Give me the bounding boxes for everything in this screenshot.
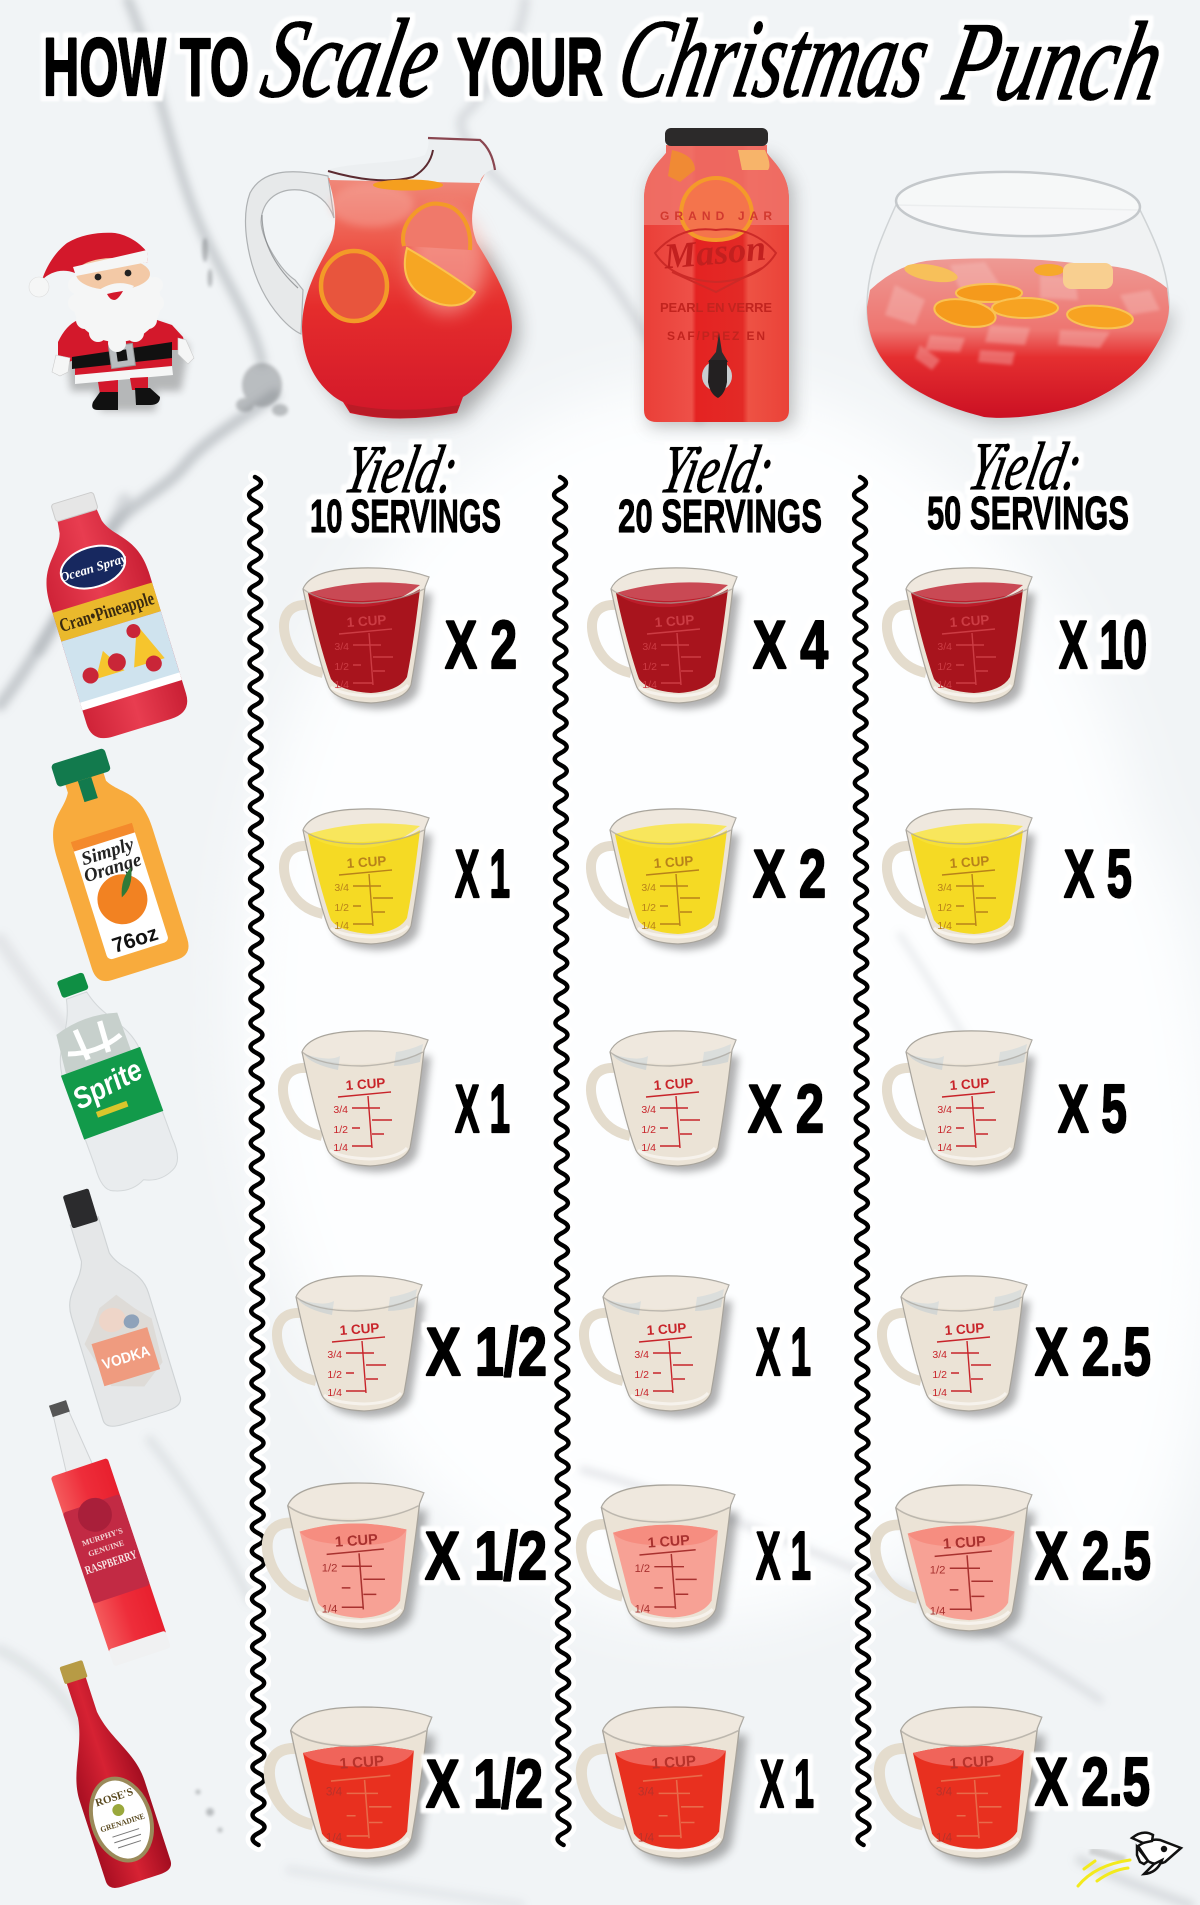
cup: grenadine x1 (581, 1707, 747, 1865)
cup: cranberry x4: 1/2 (642, 661, 657, 673)
cup: vodka x1/2: 1 CUP (339, 1320, 380, 1338)
cup: raspberry x1: 1/2 (635, 1563, 650, 1575)
header: 50 servings: Yield: (963, 429, 1089, 504)
illustration: mason jar dispenser (644, 128, 793, 426)
multipliers: raspberry: X 1 (756, 1518, 811, 1594)
multipliers: cranberry: X 4 (753, 607, 828, 683)
measuring cups: sprite row (283, 1031, 1035, 1172)
cup: orange x2: 1/2 (641, 902, 656, 914)
cup: sprite x2: 1/4 (641, 1142, 656, 1154)
multipliers: raspberry: X 2.5 (1035, 1518, 1151, 1594)
measuring cups: grenadine row (269, 1707, 1045, 1865)
bottle: raspberry liqueur: RASPBERRY (83, 1547, 139, 1577)
multipliers: sprite: X 2 (748, 1071, 824, 1147)
header: 10 servings (310, 432, 501, 542)
cup: grenadine x1/2 (269, 1707, 435, 1865)
header: 20 servings (618, 432, 822, 542)
multipliers: grenadine: X 2.5 (1035, 1744, 1150, 1820)
cup: sprite x5: 1 CUP (949, 1075, 990, 1093)
title: HOW TO (43, 22, 249, 113)
cup: orange x1: 1/2 (334, 902, 349, 914)
title: Scale (253, 0, 451, 121)
cup: grenadine x1/2: 1 CUP (339, 1753, 385, 1773)
cup: vodka x1: 1/4 (634, 1387, 649, 1399)
bottle: raspberry liqueur: MURPHY'S (81, 1526, 125, 1548)
cup: grenadine x1: 1/4 (638, 1832, 655, 1845)
bottle: simply orange juice: Orange (81, 849, 145, 887)
multipliers: vodka: X 2.5 (1035, 1314, 1151, 1390)
bottle: raspberry liqueur: GENUINE (87, 1538, 125, 1559)
multipliers: sprite: X 1 (455, 1071, 510, 1147)
cup: sprite x1: 1/4 (333, 1142, 348, 1154)
cup: orange x2 (591, 809, 739, 950)
cup: raspberry x1 (581, 1485, 738, 1635)
cup: raspberry x1: 1 CUP (647, 1533, 691, 1552)
multipliers: orange juice: X 2 (753, 836, 826, 912)
cup: sprite x5 (887, 1031, 1035, 1172)
bottle: grenadine: ROSE'S (94, 1786, 135, 1809)
cup: vodka x1: 1/2 (634, 1369, 649, 1381)
illustration: punch bowl (867, 169, 1173, 422)
header: 20 servings: Yield: (655, 432, 781, 507)
bottle: vodka (37, 1180, 183, 1430)
cup: vodka x2.5: 1/4 (932, 1387, 947, 1399)
cup: grenadine x1: 1 CUP (651, 1753, 697, 1773)
cup: grenadine x2.5: 1 CUP (949, 1753, 995, 1773)
cup: orange x1: 1/4 (334, 920, 349, 932)
cup: raspberry x2.5: 1 CUP (942, 1534, 987, 1553)
cup: sprite x2 (591, 1031, 739, 1172)
multipliers: orange juice: X 1 (455, 836, 510, 912)
bottle: vodka: VODKA (100, 1343, 153, 1373)
illustration: mason jar dispenser: GRAND JAR (660, 209, 772, 223)
cup: cranberry x2: 1/4 (334, 679, 349, 691)
multipliers: grenadine: X 1 (760, 1746, 814, 1822)
cup multipliers (425, 607, 1151, 1822)
cup: sprite x2: 1/2 (641, 1124, 656, 1136)
cup: orange x2: 1/4 (641, 920, 656, 932)
cup: grenadine x2.5: 3/4 (936, 1786, 953, 1799)
cup: orange x5: 1/2 (937, 902, 952, 914)
multipliers: raspberry: X 1/2 (425, 1518, 547, 1594)
cup: sprite x1: 3/4 (333, 1104, 348, 1116)
cup: vodka x1/2: 1/4 (327, 1387, 342, 1399)
cup: cranberry x2 (284, 568, 432, 709)
cup: raspberry x2.5: 1/2 (930, 1565, 945, 1577)
bottle: sprite (30, 962, 185, 1198)
bottle: raspberry liqueur (29, 1393, 171, 1667)
title: Christmas (609, 0, 940, 121)
cup: sprite x5: 3/4 (937, 1104, 952, 1116)
multipliers: grenadine (426, 1744, 1150, 1822)
multipliers: sprite: X 5 (1058, 1071, 1127, 1147)
cup: sprite x1: 1 CUP (345, 1075, 386, 1093)
title (43, 0, 1174, 124)
cup: raspberry x1/2: 1/4 (322, 1604, 337, 1616)
cup: vodka x2.5 (882, 1276, 1030, 1417)
cup: cranberry x2: 1/2 (334, 661, 349, 673)
cup: grenadine x2.5 (879, 1707, 1045, 1865)
illustration: pitcher of punch (246, 137, 519, 424)
title: YOUR (457, 22, 603, 113)
multipliers: cranberry: X 10 (1059, 607, 1147, 683)
cup: cranberry x4: 3/4 (642, 641, 657, 653)
cup: cranberry x4 (592, 568, 740, 709)
multipliers: vodka: X 1/2 (426, 1314, 547, 1390)
cup: sprite x2: 1 CUP (653, 1075, 694, 1093)
illustration: mason jar dispenser: SAF/PREZ EN (667, 329, 765, 343)
header: 10 servings: Yield: (339, 432, 465, 507)
multipliers: grenadine: X 1/2 (426, 1746, 543, 1822)
cup: vodka x2.5: 1/2 (932, 1369, 947, 1381)
cup: orange x5 (887, 809, 1035, 950)
cup: cranberry x2: 1 CUP (346, 612, 387, 630)
multipliers: cranberry (445, 607, 1147, 683)
wavy column dividers (249, 477, 870, 1845)
icon: rocket logo (1078, 1833, 1181, 1886)
bottle: sprite: Sprite (67, 1053, 148, 1116)
cup: vodka x1 (584, 1276, 732, 1417)
bottle: cranberry pineapple juice (22, 483, 192, 743)
cup: orange x5: 3/4 (937, 882, 952, 894)
measuring cups: raspberry row (267, 1483, 1035, 1637)
cup: vodka x1: 3/4 (634, 1349, 649, 1361)
icon: santa (29, 233, 194, 411)
cup: orange x2: 3/4 (641, 882, 656, 894)
cup: orange x5: 1 CUP (949, 853, 990, 871)
cup: grenadine x1/2: 1/4 (326, 1832, 343, 1845)
cup: raspberry x1/2: 1/2 (322, 1563, 337, 1575)
cup: vodka x2.5: 1 CUP (944, 1320, 985, 1338)
cup: sprite x1 (283, 1031, 431, 1172)
cup: grenadine x2.5: 1/4 (936, 1832, 953, 1845)
multipliers: vodka: X 1 (756, 1314, 811, 1390)
illustration: mason jar dispenser: Mason (661, 228, 768, 277)
measuring cups: cranberry row (284, 568, 1035, 709)
cup: orange x1 (284, 809, 432, 950)
multipliers: sprite (455, 1071, 1127, 1147)
cup: vodka x1: 1 CUP (646, 1320, 687, 1338)
bottle: grenadine: GRENADINE (99, 1811, 146, 1834)
cup: sprite x2: 3/4 (641, 1104, 656, 1116)
bottle: cranberry pineapple juice: Ocean Spray (58, 550, 129, 585)
measuring cups: vodka row (277, 1276, 1030, 1417)
multipliers: orange juice (455, 836, 1132, 912)
cup: orange x5: 1/4 (937, 920, 952, 932)
cup: cranberry x4: 1 CUP (654, 612, 695, 630)
cup: raspberry x1/2 (267, 1483, 427, 1635)
cup: raspberry x1/2: 1 CUP (334, 1532, 379, 1551)
cup: orange x2: 1 CUP (653, 853, 694, 871)
cup: orange x1: 3/4 (334, 882, 349, 894)
bottle: simply orange juice (30, 741, 192, 985)
cup: vodka x1/2: 1/2 (327, 1369, 342, 1381)
cup: grenadine x1/2: 3/4 (326, 1786, 343, 1799)
cup: cranberry x2: 3/4 (334, 641, 349, 653)
cup: cranberry x10 (887, 568, 1035, 709)
cup: orange x1: 1 CUP (346, 853, 387, 871)
cup: cranberry x10: 1/4 (937, 679, 952, 691)
cup: cranberry x10: 3/4 (937, 641, 952, 653)
cup: raspberry x1: 1/4 (635, 1603, 650, 1615)
header: 50 servings (927, 429, 1129, 539)
cup: cranberry x10: 1/2 (937, 661, 952, 673)
bottle: cranberry pineapple juice: Cran•Pineapple (57, 588, 157, 637)
multipliers: cranberry: X 2 (445, 607, 517, 683)
illustration: mason jar dispenser: PEARL EN VERRE (660, 300, 772, 315)
multipliers: raspberry (425, 1518, 1151, 1594)
cup: vodka x1/2 (277, 1276, 425, 1417)
multipliers: orange juice: X 5 (1064, 836, 1132, 912)
cup: sprite x5: 1/4 (937, 1142, 952, 1154)
cup: vodka x2.5: 3/4 (932, 1349, 947, 1361)
bottle: grenadine (38, 1653, 174, 1891)
bottle: simply orange juice: 76oz (109, 922, 161, 958)
cup: raspberry x2.5: 1/4 (930, 1606, 945, 1618)
header: 10 servings: 10 SERVINGS (310, 490, 501, 542)
measuring cups: orange juice row (284, 809, 1035, 950)
column headers (310, 429, 1129, 542)
bottle: simply orange juice: Simply (79, 834, 137, 870)
header: 20 servings: 20 SERVINGS (618, 490, 822, 542)
cup: vodka x1/2: 3/4 (327, 1349, 342, 1361)
cup: cranberry x4: 1/4 (642, 679, 657, 691)
cup: sprite x5: 1/2 (937, 1124, 952, 1136)
cup: cranberry x10: 1 CUP (949, 612, 990, 630)
cup: sprite x1: 1/2 (333, 1124, 348, 1136)
cup: raspberry x2.5 (875, 1485, 1035, 1637)
multipliers: vodka (426, 1314, 1151, 1390)
cup: grenadine x1: 3/4 (638, 1786, 655, 1799)
